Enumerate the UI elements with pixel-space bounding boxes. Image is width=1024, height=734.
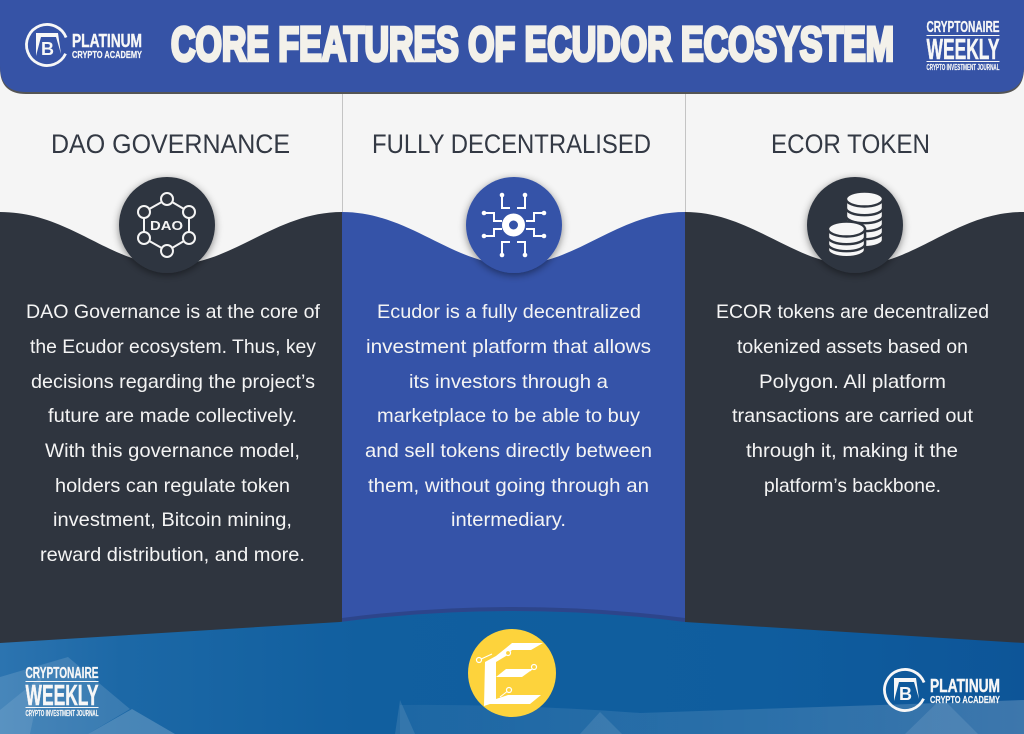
text block: fully decentralised: intermediary. xyxy=(451,509,566,531)
text block: DAO governance: DAO Governance is at the core of xyxy=(26,301,321,323)
logo: Platinum Crypto Academy footer xyxy=(878,663,1000,717)
panel: DAO governance xyxy=(0,212,342,650)
heading: DAO governance: DAO GOVERNANCE xyxy=(51,129,290,159)
text block: ECOR token: tokenized assets based on xyxy=(737,336,968,358)
text block: ECOR token: ECOR tokens are decentralized xyxy=(716,301,989,323)
text block: DAO governance: decisions regarding the project’s xyxy=(31,371,315,393)
logo: Cryptonaire Weekly footer xyxy=(26,665,99,718)
icon: DAO network: DAO xyxy=(150,218,183,233)
text block: fully decentralised: investment platform that allows xyxy=(366,336,651,358)
text block: DAO governance: the Ecudor ecosystem. Thus, key xyxy=(30,336,316,358)
heading: fully decentralised: FULLY DECENTRALISED xyxy=(372,129,651,159)
heading: ECOR token: ECOR TOKEN xyxy=(771,129,930,159)
text block: fully decentralised: them, without going through an xyxy=(368,475,649,497)
text block: fully decentralised: its investors through a xyxy=(409,371,608,393)
text block: fully decentralised: and sell tokens directly between xyxy=(365,440,652,462)
text block: ECOR token: through it, making it the xyxy=(746,440,958,462)
header banner xyxy=(0,0,1024,94)
text block: DAO governance: holders can regulate token xyxy=(55,475,290,497)
text block: ECOR token xyxy=(716,301,989,497)
panel: fully decentralised xyxy=(342,212,685,650)
logo: Cryptonaire Weekly xyxy=(926,19,1000,72)
text block: ECOR token: platform’s backbone. xyxy=(764,475,941,497)
text block: DAO governance: future are made collectively. xyxy=(48,405,297,427)
text block: DAO governance: With this governance model, xyxy=(45,440,300,462)
icon: Ecudor coin xyxy=(468,629,556,717)
panel: ECOR token xyxy=(685,212,1024,650)
icon: decentralised circuit xyxy=(466,177,562,273)
text block: fully decentralised: marketplace to be able to buy xyxy=(377,405,640,427)
icon: DAO network xyxy=(119,177,215,273)
footer band xyxy=(0,607,1024,734)
text block: fully decentralised xyxy=(365,301,652,531)
icon: coin stacks xyxy=(807,177,903,273)
logo: Platinum Crypto Academy xyxy=(20,18,142,72)
text block: ECOR token: Polygon. All platform xyxy=(759,371,946,393)
text block: DAO governance: investment, Bitcoin mining, xyxy=(53,509,292,531)
column dividers xyxy=(342,94,686,214)
text block: fully decentralised: Ecudor is a fully decentralized xyxy=(377,301,641,323)
text block: DAO governance xyxy=(26,301,321,566)
text block: ECOR token: transactions are carried out xyxy=(732,405,974,427)
text block: DAO governance: reward distribution, and more. xyxy=(40,544,305,566)
